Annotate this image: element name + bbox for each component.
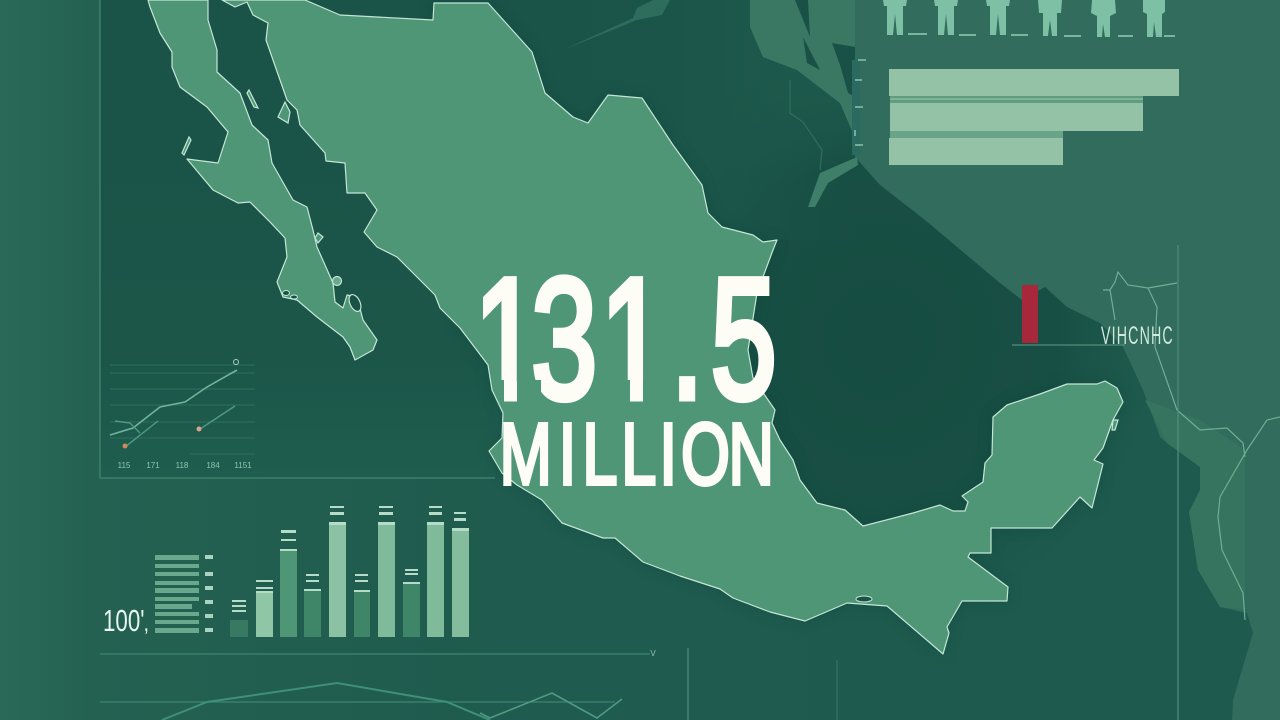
- person 5: [1091, 0, 1116, 37]
- chart: line chart: 171: [146, 461, 160, 470]
- label: 100: 100',: [103, 603, 148, 638]
- chart: bottom line chart: V: [650, 649, 656, 658]
- panel frame lines: [100, 0, 495, 478]
- soft shadow: [433, 3, 1123, 654]
- chart: line chart: 1151: [234, 461, 252, 470]
- dashes: [908, 33, 1175, 37]
- vertical rule right: [1177, 245, 1179, 720]
- chart: horizontal mini bars: [155, 555, 213, 633]
- map: Mexico: [148, 0, 1123, 654]
- inlets: [795, 0, 855, 97]
- islands: [182, 90, 1118, 430]
- peninsula strip: [808, 157, 858, 207]
- headline number: 131.5: [474, 243, 777, 435]
- person 3: [986, 0, 1010, 35]
- person 2: [934, 0, 958, 35]
- Baja California: [148, 0, 377, 360]
- gulf shading: [700, 0, 1200, 700]
- marker: red bar: [1022, 285, 1038, 343]
- chart: line chart: 115: [118, 461, 131, 470]
- chart: line chart: 118: [176, 461, 189, 470]
- chart: bottom line chart: [100, 648, 837, 720]
- person 4: [1038, 0, 1062, 36]
- region: contour lines: [1103, 272, 1280, 620]
- icons: people row: [883, 0, 1175, 37]
- baseline rule: [1012, 344, 1125, 346]
- chart: stacked horizontal bars: [889, 69, 1179, 165]
- chart: vertical bars: [230, 506, 469, 637]
- mainland: [222, 0, 1123, 654]
- person 1: [883, 0, 907, 35]
- person 6: [1143, 0, 1165, 37]
- label: VIHCNHC: VIHCNHC: [1101, 323, 1174, 350]
- strip top centre: [563, 0, 670, 50]
- panel: left map frame: [100, 0, 495, 478]
- chart: line chart: [110, 360, 255, 470]
- headline unit: MILLION: [500, 406, 774, 504]
- top centre dark water: [495, 0, 855, 240]
- faint contour: [790, 80, 822, 170]
- chart: line chart: 184: [206, 461, 220, 470]
- region: northern land: [563, 0, 1280, 720]
